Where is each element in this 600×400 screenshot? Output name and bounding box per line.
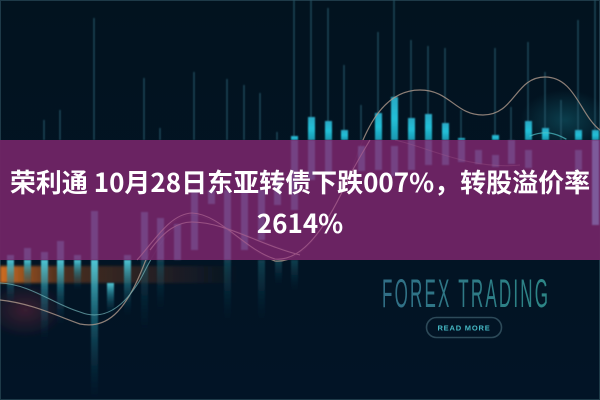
- candlestick wicks: [44, 0, 595, 140]
- candlestick columns fading below band: [7, 260, 298, 400]
- title: [10, 163, 590, 241]
- purple banner: [0, 140, 600, 260]
- candles seen through banner: [7, 140, 599, 260]
- candlestick bodies above band: [291, 97, 599, 140]
- glow: orange light streak: [0, 266, 240, 338]
- curves seen through banner: [137, 140, 520, 260]
- title: 荣利通 10月28日东亚转债下跌007%，转股溢价率: [10, 163, 590, 200]
- heading: FOREX TRADING: FOREX TRADING: [382, 271, 548, 316]
- price curves: [0, 77, 600, 325]
- glow: teal light: [520, 90, 600, 150]
- title: 2614%: [257, 204, 343, 241]
- button: read more: [426, 318, 502, 338]
- button: read more: READ MORE: [437, 324, 491, 332]
